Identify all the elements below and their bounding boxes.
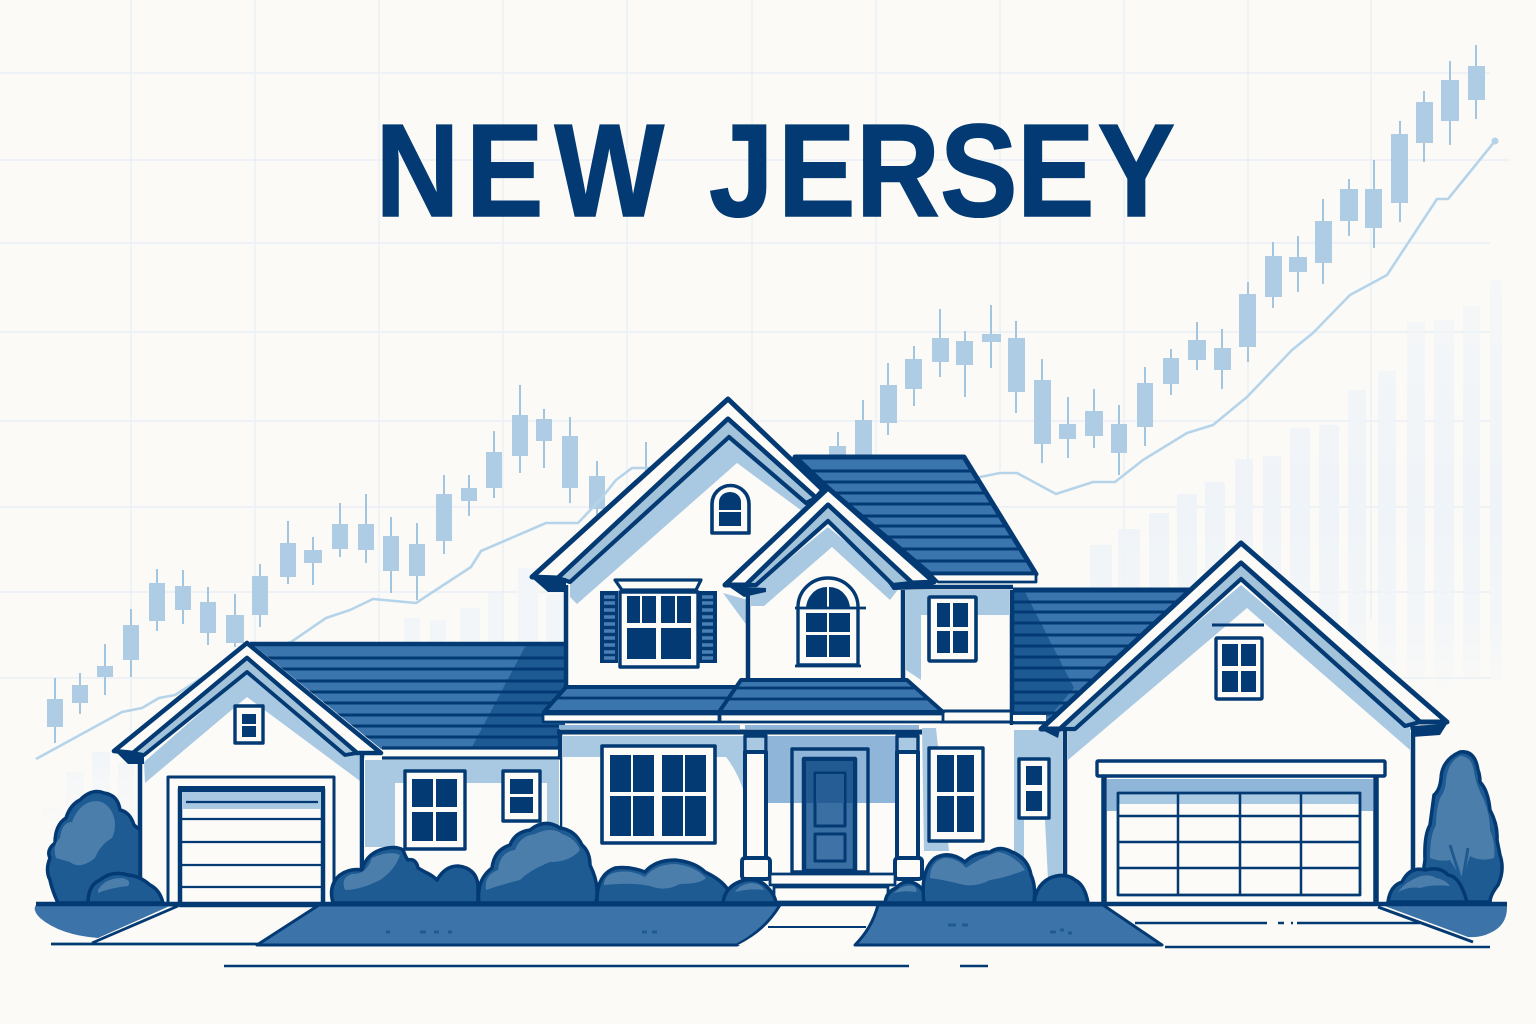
shrub right of steps xyxy=(885,882,928,903)
foundation line xyxy=(36,902,1507,906)
right gable window xyxy=(1212,625,1264,699)
connector windows xyxy=(405,771,540,849)
window with shutters xyxy=(600,580,717,667)
porch steps xyxy=(770,874,895,902)
front walkway xyxy=(738,905,877,945)
connector wall xyxy=(364,748,560,905)
center-right shrub xyxy=(923,848,1035,903)
main upper roof xyxy=(790,457,1040,582)
shrub by window xyxy=(597,860,728,903)
side small window xyxy=(1019,759,1049,818)
center porch roof xyxy=(719,680,943,722)
lower wall and porch xyxy=(557,725,1013,905)
right upper window xyxy=(929,597,976,661)
side wall right xyxy=(1013,718,1065,905)
left gable window xyxy=(235,706,263,743)
house illustration xyxy=(35,399,1507,966)
shrub left of steps xyxy=(723,880,776,903)
second gable wall xyxy=(748,521,903,682)
right wing wall xyxy=(1065,579,1413,905)
right tree xyxy=(1424,752,1502,902)
shrubs and trees xyxy=(48,752,1502,903)
left garage door xyxy=(168,777,334,905)
porch right column xyxy=(895,736,922,879)
main upper wall xyxy=(566,437,820,688)
lower right window xyxy=(929,748,983,841)
right garage door xyxy=(1097,761,1385,905)
left lawn patch xyxy=(35,905,262,944)
candlestick chart xyxy=(47,45,1485,743)
front door xyxy=(792,749,868,872)
volume bars xyxy=(42,280,1502,847)
left porch roof xyxy=(543,687,737,722)
trend line xyxy=(36,138,1498,759)
background grid xyxy=(0,0,1510,760)
upper attic arched window xyxy=(712,486,749,533)
right block wall xyxy=(903,586,1013,905)
small left shrub xyxy=(88,873,163,903)
shrub under connector xyxy=(332,848,478,903)
lower main window xyxy=(602,746,715,843)
small right shrub xyxy=(1388,869,1467,902)
left gable trim xyxy=(114,643,381,764)
right wing roof xyxy=(1005,590,1200,722)
arched window xyxy=(795,578,866,666)
left garage wing wall xyxy=(140,672,362,905)
main gable trim xyxy=(532,399,823,592)
title: NEW JERSEY xyxy=(375,97,1175,245)
left tree xyxy=(48,792,140,903)
driveway and street lines xyxy=(224,923,1490,966)
second gable trim xyxy=(725,488,934,597)
right gable trim xyxy=(1041,543,1447,738)
center-left lawn xyxy=(257,905,780,945)
right lawn patch xyxy=(1378,905,1507,942)
shrub by side wall xyxy=(1034,875,1088,903)
tall center-left shrub xyxy=(479,823,597,903)
porch left column xyxy=(742,736,770,879)
left wing roof xyxy=(240,644,570,749)
center-right lawn xyxy=(855,905,1162,945)
